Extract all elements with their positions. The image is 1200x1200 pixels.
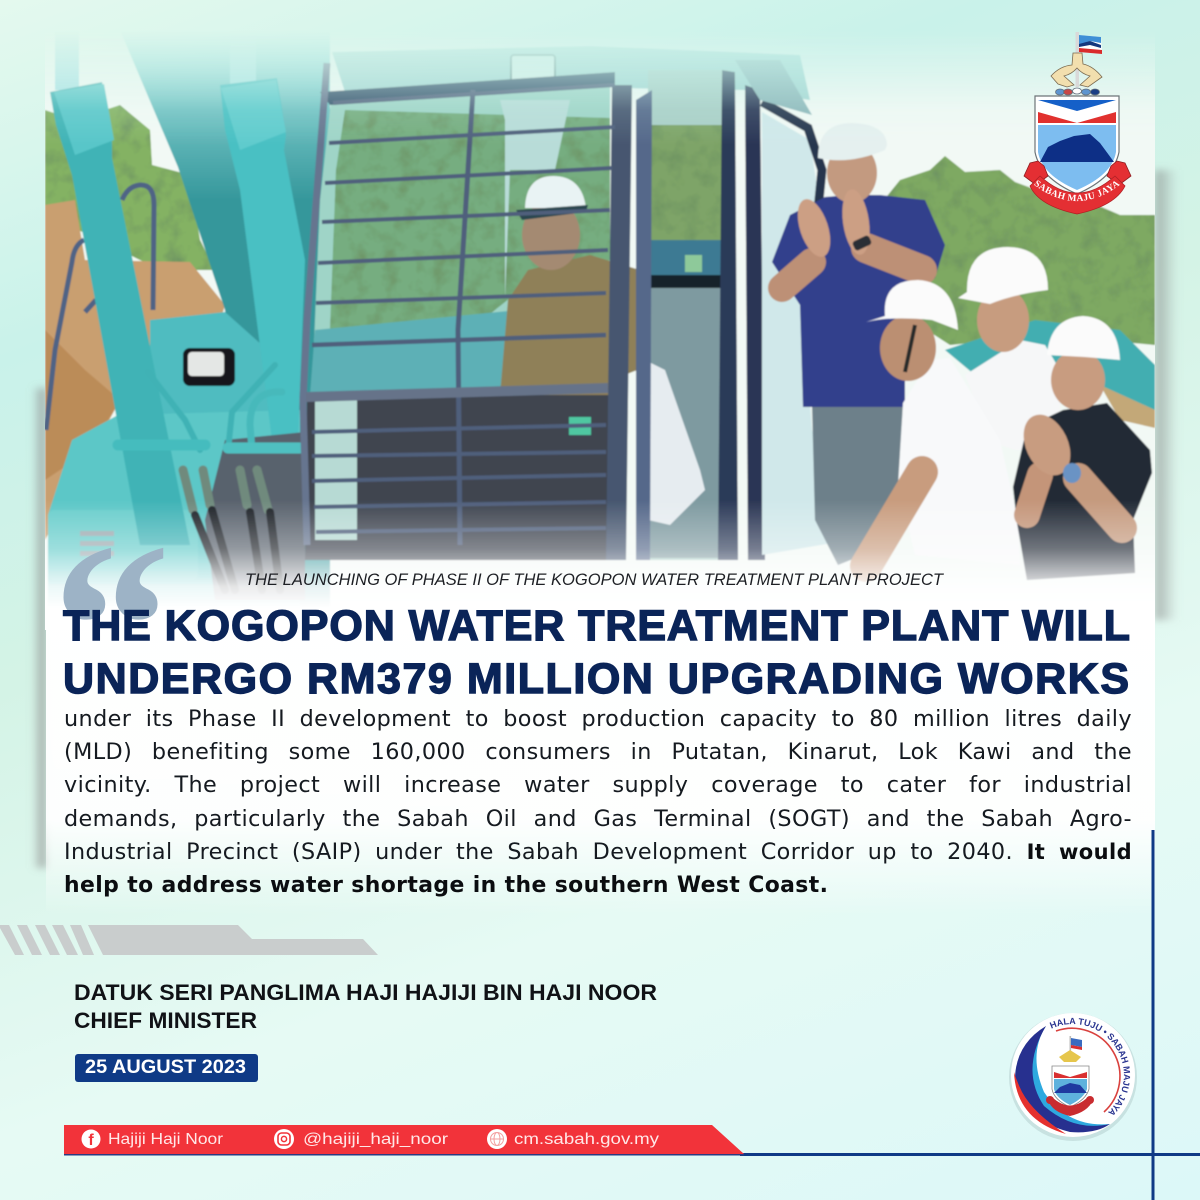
lower panel reflection — [315, 395, 357, 540]
machine body — [48, 410, 301, 598]
dark lower machinery — [205, 432, 305, 600]
ribbon — [1024, 160, 1132, 214]
icon: facebook — [82, 1130, 100, 1149]
hydraulic hoses — [118, 365, 300, 590]
photo: excavator launching scene — [40, 25, 1160, 640]
pillar — [606, 85, 632, 560]
cab dark lower interior — [305, 385, 612, 560]
lower body panel — [49, 510, 196, 536]
right drop shadow — [1155, 170, 1178, 620]
man in cab — [500, 175, 638, 396]
door foliage — [650, 125, 722, 243]
body line five: Industrial Precinct (SAIP) under the Sabah Development Corridor up to 2040. It would — [64, 839, 1132, 865]
green label — [569, 417, 591, 435]
icon: Sabah coat of arms — [1024, 32, 1132, 214]
door window frame — [762, 102, 822, 210]
left drop shadow — [32, 388, 46, 868]
body line four: demands, particularly the Sabah Oil and Gas Terminal (SOGT) and the Sabah Agro- — [64, 806, 1132, 832]
subtitle: THE LAUNCHING OF PHASE II OF THE KOGOPON WATER TREATMENT PLANT PROJECT — [245, 571, 945, 589]
door panel — [762, 112, 850, 555]
trees on the right — [880, 156, 1155, 345]
railings — [46, 185, 154, 430]
bottom white fade — [40, 500, 1160, 635]
body line two: (MLD) benefiting some 160,000 consumers in Putatan, Kinarut, Lok Kawi and the — [64, 739, 1132, 765]
cab seat — [500, 100, 570, 300]
body line six, bold: help to address water shortage in the southern West Coast. — [64, 873, 828, 898]
crescent: cyan — [1024, 1026, 1110, 1129]
website: cm.sabah.gov.my — [514, 1131, 659, 1148]
left cylinder — [50, 30, 190, 545]
date badge: 25 AUGUST 2023 — [85, 1057, 246, 1078]
roof lamp — [511, 55, 555, 85]
cab interior view — [314, 86, 611, 341]
crescent: red — [1014, 1072, 1066, 1134]
door pillar right — [745, 85, 765, 560]
seal red arc — [1056, 1028, 1120, 1112]
cab glass lower tint — [310, 310, 508, 392]
quotation mark: “ — [52, 495, 171, 758]
darker soil texture — [45, 330, 120, 480]
navy vertical line — [1152, 830, 1154, 1200]
door opening — [648, 70, 728, 560]
logo seal: Hala Tuju — [1009, 1013, 1137, 1141]
soil bank — [45, 200, 225, 540]
door dark edge — [735, 60, 812, 115]
beads — [1056, 88, 1100, 95]
man with white shirt at back — [958, 247, 1060, 450]
man in black shirt — [1013, 316, 1152, 580]
cab foliage through window — [330, 110, 610, 330]
shield — [1035, 96, 1119, 194]
plastic bag — [645, 360, 705, 525]
name: DATUK SERI PANGLIMA HAJI HAJIJI BIN HAJI NOOR — [74, 980, 657, 1005]
sky — [45, 51, 1155, 584]
seal text: HALA TUJU • SABAH MAJU JAYA — [1050, 1018, 1130, 1115]
ribbon: SABAH MAJU JAYA — [1034, 180, 1120, 202]
headline line one: THE KOGOPON WATER TREATMENT PLANT WILL — [63, 602, 1130, 650]
tree on the left — [45, 105, 215, 270]
right cylinder — [220, 30, 305, 440]
dashboard — [650, 240, 722, 276]
distant teal machine — [945, 320, 1155, 412]
facebook name: Hajiji Haji Noor — [108, 1131, 224, 1148]
text panel backdrop — [46, 600, 1155, 915]
crescent: navy — [1015, 1026, 1110, 1132]
icon: facebook: f — [88, 1132, 94, 1149]
name and title — [74, 980, 657, 1033]
icon: instagram — [274, 1129, 294, 1149]
small coat of arms — [1046, 1036, 1094, 1116]
body paragraph — [64, 706, 1132, 898]
inner door wall — [650, 288, 724, 558]
engine cover — [148, 311, 268, 415]
man in blue shirt — [772, 123, 945, 565]
social media bar — [64, 1125, 744, 1156]
vent slats — [80, 531, 114, 556]
date badge — [75, 1054, 258, 1082]
headline line two: UNDERGO RM379 MILLION UPGRADING WORKS — [63, 655, 1129, 703]
work lamp — [183, 348, 235, 386]
roof underside — [320, 72, 615, 105]
icon: globe — [487, 1129, 507, 1149]
instagram handle: @hajiji_haji_noor — [303, 1131, 449, 1148]
headline — [63, 602, 1130, 703]
black ledge — [650, 275, 724, 288]
arms holding the flag — [1051, 53, 1102, 87]
door pillar — [718, 70, 738, 560]
navy horizontal line — [740, 1153, 1200, 1156]
guard rails — [303, 63, 615, 545]
grey stripe divider — [0, 925, 378, 955]
tan ground at right — [1100, 385, 1155, 428]
roof of cab — [332, 46, 810, 100]
body line one: under its Phase II development to boost production capacity to 80 million litres daily — [64, 706, 1132, 732]
exit sign — [685, 255, 702, 272]
flag — [1076, 32, 1102, 87]
role: CHIEF MINISTER — [74, 1008, 257, 1033]
body line three: vicinity. The project will increase water supply coverage to cater for industrial — [64, 772, 1132, 798]
excavator boom — [126, 40, 331, 601]
man in white polo — [866, 280, 1020, 566]
pillar two — [636, 90, 652, 560]
